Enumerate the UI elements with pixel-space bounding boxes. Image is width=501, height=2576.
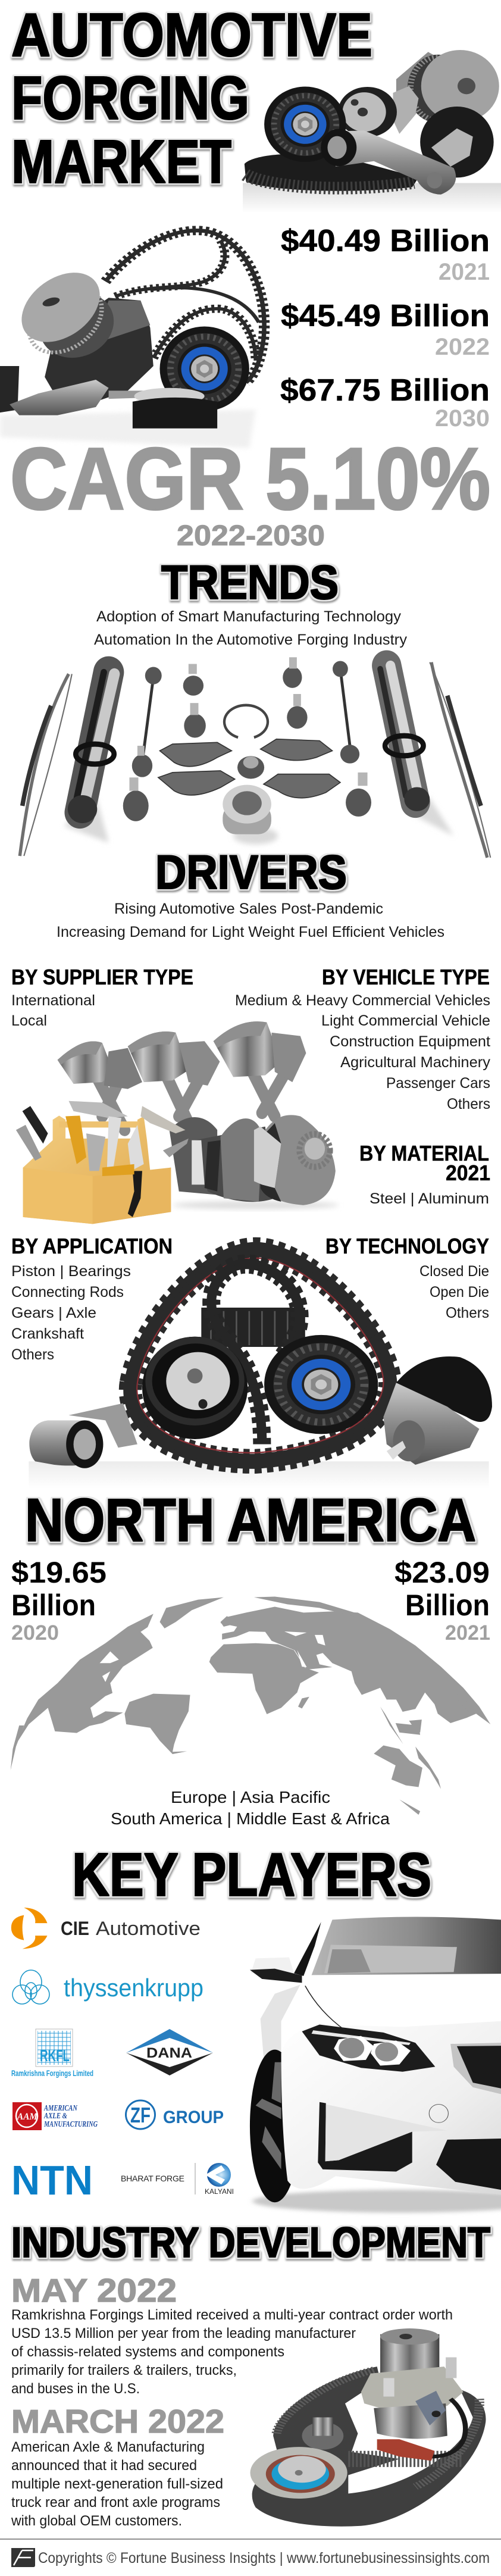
segment: by application: [11, 1234, 173, 1363]
logo: Bharat Forge Kalyani: [121, 2163, 234, 2196]
drivers text: Rising Automotive Sales Post-Pandemic: [114, 901, 383, 917]
value 2030: [280, 373, 490, 432]
logo: Dana: [126, 2029, 213, 2075]
march 2022 entry: truck rear and front axle programs: [11, 2494, 220, 2511]
value 2022: $45.49 Billion: [281, 299, 490, 333]
segment: by vehicle type: Light Commercial Vehicle: [321, 1012, 490, 1029]
logo: ZF Group: [126, 2100, 224, 2129]
segment: by material: [359, 1141, 490, 1207]
trends heading: TRENDS: [161, 556, 339, 609]
other regions: [111, 1788, 390, 1828]
segment: by supplier type: [11, 965, 193, 1029]
may 2022 entry: Ramkrishna Forgings Limited received a multi-year contract order worth: [11, 2307, 453, 2323]
logo: Dana: DANA: [146, 2045, 192, 2061]
logo: ZF Group: GROUP: [163, 2108, 224, 2127]
logo: American Axle: AXLE &: [43, 2112, 67, 2121]
title: MARKET: [11, 127, 231, 196]
segment: by application: Others: [11, 1346, 54, 1363]
value 2021: 2021: [439, 259, 490, 285]
logo: Ramkrishna Forgings: [11, 2029, 93, 2078]
title: AUTOMOTIVE: [11, 1, 372, 69]
value 2030: 2030: [435, 405, 490, 432]
may 2022 entry: of chassis-related systems and components: [11, 2344, 284, 2360]
may 2022 entry: [11, 2272, 453, 2397]
segment: by technology: Others: [446, 1305, 489, 1321]
region value 2020: $19.65: [11, 1556, 107, 1589]
logo: American Axle: AMERICAN: [43, 2104, 78, 2113]
value 2021: [281, 224, 490, 285]
logo: Ramkrishna Forgings: RKFL: [40, 2046, 70, 2065]
value 2022: 2022: [435, 334, 490, 360]
march 2022 entry: multiple next-generation full-sized: [11, 2476, 223, 2492]
segment: by vehicle type: [235, 965, 490, 1112]
region value 2021: 2021: [445, 1621, 490, 1645]
icon: thyssenkrupp rings: [12, 1970, 49, 2004]
trends text: Adoption of Smart Manufacturing Technology: [96, 608, 402, 625]
image: timing belt kit center: [29, 1249, 492, 1489]
region value 2021: [394, 1556, 490, 1645]
logo: American Axle: AAM: [17, 2112, 38, 2122]
region value 2020: 2020: [11, 1621, 59, 1645]
may 2022 entry: MAY 2022: [11, 2272, 177, 2309]
segment: by technology: Open Die: [430, 1284, 489, 1300]
segment: by application: BY APPLICATION: [11, 1234, 173, 1258]
segment: by vehicle type: Passenger Cars: [386, 1075, 490, 1092]
logo: Bharat Forge Kalyani: BHARAT FORGE: [121, 2174, 184, 2183]
logo: Bharat Forge Kalyani: KALYANI: [205, 2187, 234, 2196]
segment: by material: 2021: [446, 1161, 490, 1185]
image: suspension and brake parts: [20, 657, 490, 858]
image: white car: [250, 1914, 501, 2212]
segment: by application: Piston | Bearings: [11, 1263, 131, 1280]
logo: thyssenkrupp: thyssenkrupp: [64, 1974, 203, 2002]
icon: Kalyani mark: [205, 2163, 231, 2187]
segment: by application: Crankshaft: [11, 1325, 84, 1342]
trends text: [94, 608, 407, 648]
segment: by vehicle type: Agricultural Machinery: [340, 1054, 490, 1071]
other regions: Europe | Asia Pacific: [171, 1788, 330, 1806]
title: FORGING: [11, 64, 249, 132]
image: belt kit with water pump: [250, 2328, 486, 2527]
march 2022 entry: with global OEM customers.: [11, 2513, 182, 2529]
segment: by vehicle type: Medium & Heavy Commercial Vehicles: [235, 992, 490, 1009]
market values: [280, 224, 490, 432]
region value 2021: $23.09: [394, 1556, 490, 1589]
may 2022 entry: and buses in the U.S.: [11, 2381, 140, 2397]
image: timing belt kit top right: [243, 50, 501, 213]
value 2030: $67.75 Billion: [280, 373, 490, 408]
march 2022 entry: MARCH 2022: [11, 2403, 224, 2440]
drivers heading: DRIVERS: [155, 846, 347, 899]
region value 2021: Billion: [405, 1589, 490, 1622]
segment: by technology: Closed Die: [419, 1263, 489, 1280]
logo: CIE Automotive: Automotive: [96, 1918, 201, 1939]
icon: Fortune Business Insights logo: [11, 2548, 35, 2567]
march 2022 entry: [11, 2403, 224, 2529]
region value 2020: Billion: [11, 1589, 96, 1622]
segment: by vehicle type: Construction Equipment: [330, 1033, 490, 1050]
logo: American Axle: MANUFACTURING: [43, 2120, 98, 2129]
drivers text: [57, 901, 444, 940]
logo: ZF Group: ZF: [130, 2103, 151, 2127]
may 2022 entry: primarily for trailers & trailers, trucks,: [11, 2362, 237, 2378]
segment: by application: Connecting Rods: [11, 1284, 124, 1300]
march 2022 entry: announced that it had secured: [11, 2458, 197, 2474]
map: world globe: [11, 1596, 490, 1815]
title: [11, 1, 372, 196]
segment: by supplier type: Local: [11, 1012, 47, 1029]
segment: by technology: [325, 1234, 489, 1321]
key players heading: KEY PLAYERS: [72, 1840, 431, 1909]
segment: by vehicle type: Others: [447, 1096, 490, 1112]
image: timing belt and water pump left: [0, 230, 264, 448]
trends text: Automation In the Automotive Forging Industry: [94, 632, 407, 648]
segment: by supplier type: International: [11, 992, 95, 1009]
logo: NTN: NTN: [11, 2157, 93, 2203]
segment: by supplier type: BY SUPPLIER TYPE: [11, 965, 193, 989]
segment: by material: Steel | Aluminum: [370, 1190, 489, 1207]
segment: by application: Gears | Axle: [11, 1305, 96, 1321]
image: pistons, crankshaft and toolbox: [16, 1021, 339, 1224]
logo: CIE Automotive: CIE: [61, 1918, 89, 1939]
icon: CIE mark: [11, 1908, 47, 1949]
logo: CIE Automotive: [11, 1908, 201, 1949]
logo: American Axle: [12, 2102, 98, 2130]
logo: Ramkrishna Forgings: Ramkrishna Forgings Limited: [11, 2068, 93, 2078]
CAGR: 2022-2030: [177, 520, 325, 552]
value 2022: [281, 299, 490, 360]
segment: by material: BY MATERIAL: [359, 1141, 489, 1165]
other regions: South America | Middle East & Africa: [111, 1809, 390, 1828]
drivers text: Increasing Demand for Light Weight Fuel Efficient Vehicles: [57, 924, 444, 940]
logo: thyssenkrupp: [12, 1970, 203, 2004]
region value 2020: [11, 1556, 107, 1645]
may 2022 entry: USD 13.5 Million per year from the leading manufacturer: [11, 2325, 356, 2341]
march 2022 entry: American Axle & Manufacturing: [11, 2439, 205, 2455]
value 2021: $40.49 Billion: [281, 224, 490, 258]
